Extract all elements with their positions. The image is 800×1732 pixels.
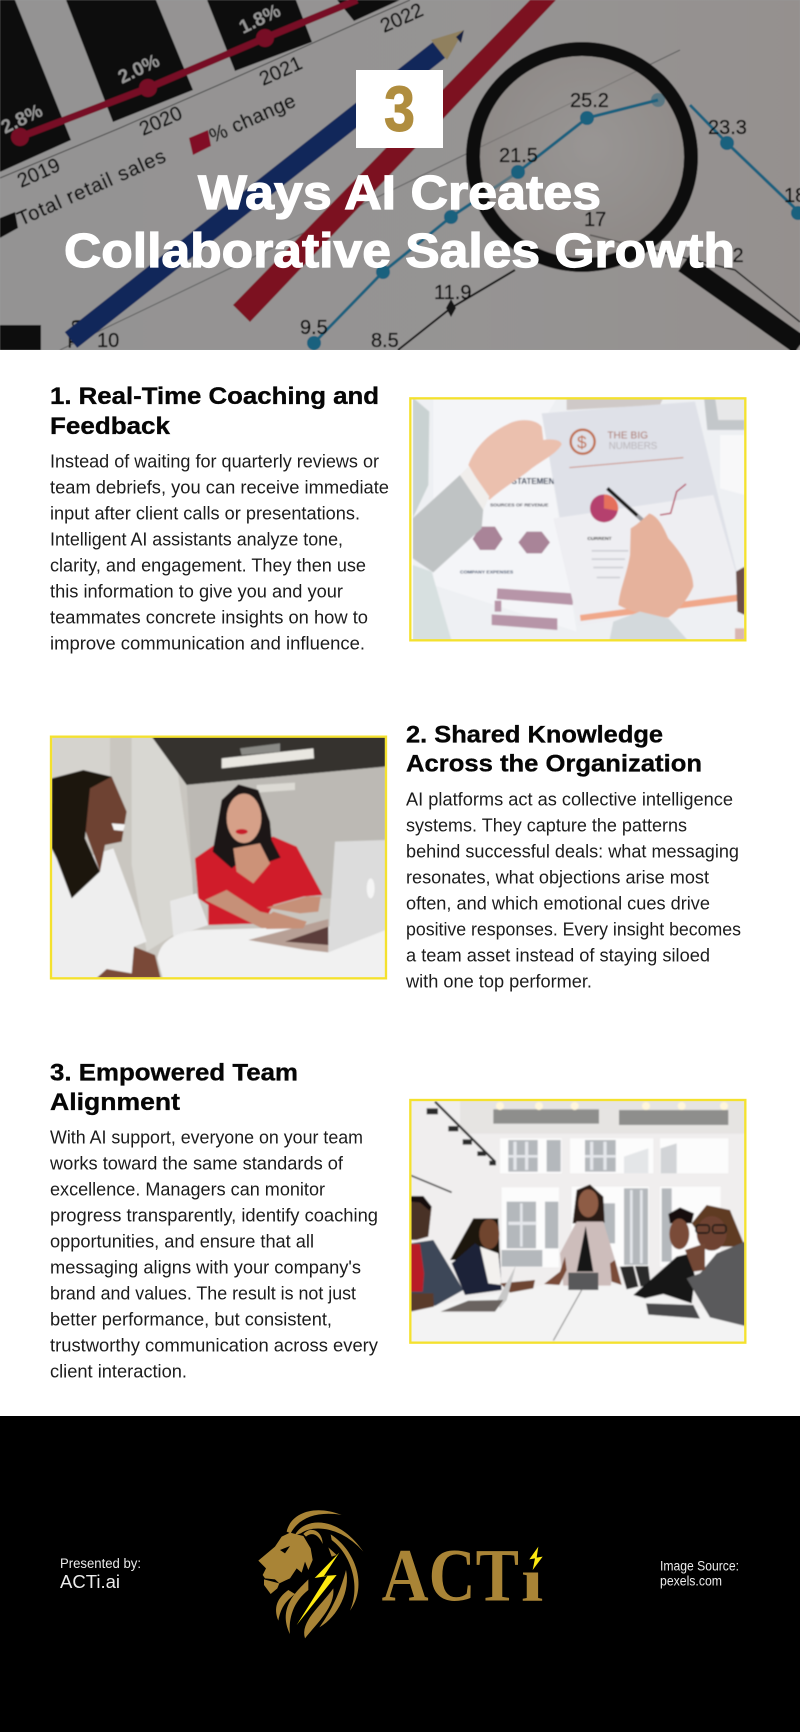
title: Collaborative Sales Growth (64, 225, 735, 278)
text block: section 3 body: With AI support, everyone on your team (50, 1128, 363, 1148)
text block: section 2 body: often, and which emotional cues drive (406, 893, 710, 913)
heading: section 1: 1. Real-Time Coaching and (50, 383, 379, 410)
chart year labels: 2022 (377, 0, 427, 38)
person: woman in black (633, 1207, 695, 1303)
chart value labels: 10 (97, 330, 119, 352)
chart year labels: 2020 (136, 102, 186, 141)
chart value labels: .2 (727, 245, 744, 267)
chart value labels: 21.5 (499, 145, 538, 167)
table (157, 925, 386, 978)
conference table (411, 1285, 745, 1342)
windows (500, 1138, 728, 1267)
sleeve (413, 475, 483, 572)
chair (170, 893, 208, 937)
underlying paper text: STATEMENT (512, 477, 559, 486)
icon: lion head (258, 1510, 363, 1638)
woman in red (195, 784, 323, 929)
chart value labels (97, 90, 800, 352)
vertical axis label: Tm (66, 319, 88, 348)
chart value labels: 9.5 (300, 317, 328, 339)
icon: lightning bolt (297, 1553, 339, 1625)
chart legend: % change (206, 90, 299, 148)
title (64, 167, 735, 278)
red pencil (233, 0, 556, 322)
heading: section 2 (406, 721, 702, 778)
presented by text: Presented by: (60, 1556, 141, 1571)
photo frame (410, 1100, 745, 1343)
text block: section 3 body (49, 1128, 378, 1382)
panel: section 2 (51, 721, 741, 991)
title: Ways AI Creates (198, 167, 601, 220)
heading: section 3 (50, 1060, 298, 1116)
text block: section 1 body (50, 451, 389, 653)
text block: section 2 body: AI platforms act as collective intelligence (406, 789, 733, 809)
hero photo: charts, pencils and magnifier (0, 0, 800, 352)
line chart series (307, 93, 800, 350)
photo: hands reviewing report: COMPANY EXPENSES (460, 570, 514, 576)
text block: section 3 body: works toward the same standards of (49, 1154, 344, 1174)
text block: section 1 body: improve communication and influence. (50, 633, 365, 653)
chart value labels: 17 (584, 209, 606, 231)
heading: section 3: 3. Empowered Team (50, 1060, 298, 1087)
chart value labels: 11.9 (434, 282, 471, 304)
chart value labels: 8.5 (371, 330, 399, 352)
text block: section 2 body: resonates, what objections arise most (406, 867, 709, 887)
person: woman in navy (441, 1218, 535, 1312)
image source text: Image Source: (660, 1559, 739, 1574)
photo frame (51, 737, 386, 978)
text block: section 1 body: Instead of waiting for quarterly reviews or (50, 451, 379, 471)
image source text (660, 1559, 739, 1588)
heading: section 1: Feedback (50, 413, 170, 440)
text block: section 1 body: team debriefs, you can receive immediate (50, 477, 389, 497)
wordmark: i (521, 1547, 543, 1615)
heading: section 3: Alignment (50, 1089, 180, 1116)
chart year labels: 2021 (256, 52, 306, 91)
text block: section 3 body: better performance, but consistent, (50, 1310, 332, 1330)
left hand (468, 420, 562, 500)
logo: ACTi lion (258, 1510, 545, 1638)
chart percent labels (0, 1, 284, 138)
text block: section 2 body (405, 789, 741, 991)
report sheet (542, 402, 736, 570)
number badge: 3 (384, 73, 415, 145)
photo: hands reviewing report: NUMBERS (609, 441, 658, 452)
dark photo overlay (0, 0, 800, 350)
photo: team around conference table (410, 1100, 745, 1343)
text block: section 1 body: clarity, and engagement. They then use (50, 555, 366, 575)
photo frame (410, 398, 745, 640)
pen (607, 488, 637, 516)
laptop (248, 840, 386, 952)
photo: hands reviewing report (410, 397, 745, 641)
person: woman in glasses (646, 1205, 745, 1326)
text block: section 3 body: brand and values. The result is not just (50, 1284, 356, 1304)
person: left man (411, 1196, 463, 1312)
heading: section 2: 2. Shared Knowledge (406, 721, 663, 748)
heading: section 1 (50, 383, 379, 440)
chart value labels: 23.3 (708, 117, 747, 139)
laptops on table (620, 1266, 651, 1289)
chart percent labels: 1.8% (236, 1, 284, 38)
text block: section 3 body: trustworthy communication across every (50, 1336, 378, 1356)
number badge (356, 70, 443, 148)
text block: section 1 body: teammates concrete insights on how to (50, 607, 368, 627)
chart value labels: 25.2 (570, 90, 609, 112)
text block: section 1 body: Intelligent AI assistants analyze tone, (50, 529, 343, 549)
photo: hands reviewing report: SOURCES OF REVENUE (490, 503, 549, 509)
text block: section 3 body: messaging aligns with your company's (50, 1258, 361, 1278)
photo: hands reviewing report: CURRENT (587, 536, 612, 542)
photo: two colleagues at laptop (51, 737, 386, 978)
text block: section 2 body: with one top performer. (405, 971, 592, 991)
right hand (618, 513, 693, 618)
photo: hands reviewing report: $ (577, 432, 587, 452)
chart year labels (14, 0, 427, 193)
icon: small bolt (529, 1547, 543, 1570)
panel: section 1 (50, 383, 745, 653)
chart year labels: 2019 (14, 154, 64, 193)
photo: hands reviewing report: THE BIG (607, 430, 648, 441)
heading: section 2: Across the Organization (406, 751, 702, 778)
hexagons (473, 527, 503, 550)
text block: section 1 body: this information to give you and your (50, 581, 343, 601)
text block: section 2 body: systems. They capture the patterns (406, 815, 687, 835)
text block: section 3 body: client interaction. (50, 1362, 187, 1382)
woman in white (52, 770, 161, 978)
text block: section 2 body: positive responses. Every insight becomes (406, 919, 741, 939)
text block: section 3 body: excellence. Managers can monitor (50, 1180, 325, 1200)
text block: section 2 body: behind successful deals: what messaging (406, 841, 739, 861)
magnifier (473, 49, 800, 345)
chart legend (0, 90, 299, 238)
blue pencil (71, 30, 464, 340)
text block: section 3 body: progress transparently, identify coaching (50, 1206, 378, 1226)
image source text: pexels.com (660, 1574, 722, 1588)
person: standing woman (544, 1184, 622, 1290)
wordmark: ACT (382, 1535, 519, 1618)
bars (497, 588, 573, 605)
chart percent labels: 2.0% (115, 51, 163, 88)
presented by text (60, 1556, 141, 1592)
presented by text: ACTi.ai (60, 1572, 120, 1592)
text block: section 1 body: input after client calls or presentations. (50, 503, 360, 523)
text block: section 3 body: opportunities, and ensure that all (50, 1232, 314, 1252)
panel: hero header (0, 0, 800, 352)
text block: section 2 body: a team asset instead of staying siloed (406, 945, 710, 965)
panel: section 3 (49, 1060, 745, 1382)
chart legend: Total retail sales (14, 145, 169, 231)
panel: footer (0, 1416, 800, 1732)
